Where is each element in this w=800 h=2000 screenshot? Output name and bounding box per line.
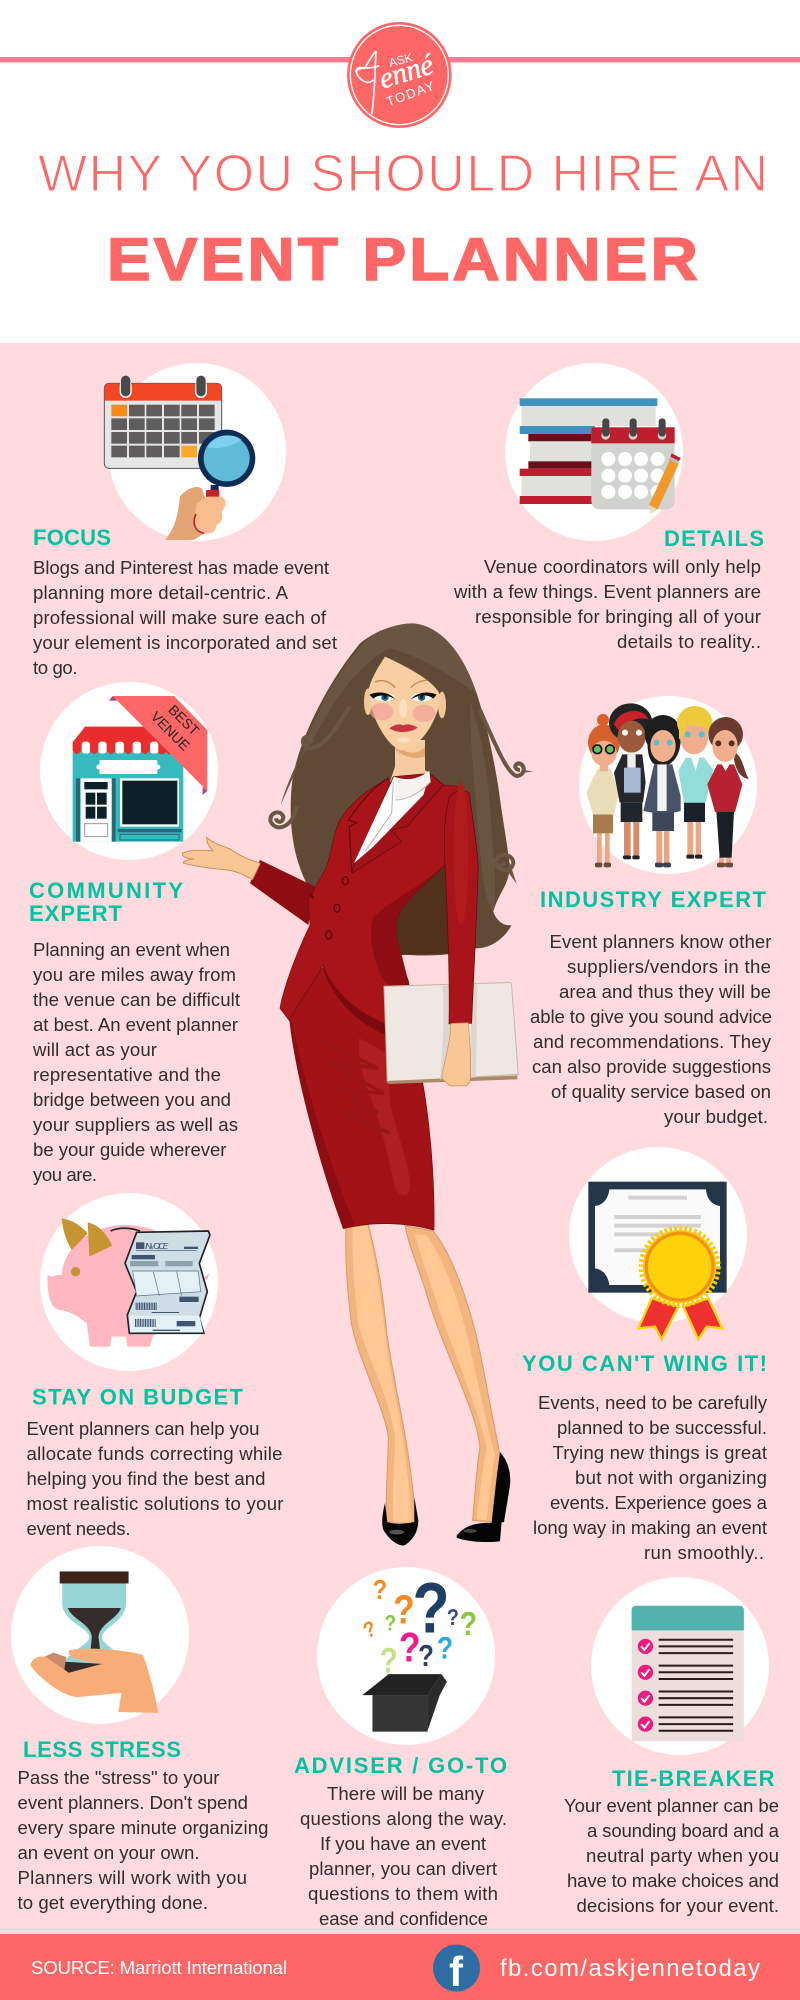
question marks: ? — [360, 1616, 379, 1644]
text: less stress: Planners will work with you — [18, 1867, 247, 1888]
question marks: ? — [380, 1642, 398, 1680]
less stress circle — [11, 1546, 189, 1724]
text: adviser / go-to — [300, 1783, 507, 1929]
neck, face and blouse — [364, 657, 446, 782]
panel: details — [453, 363, 764, 652]
icon: checklist — [632, 1606, 744, 1741]
text: focus: to go. — [33, 657, 78, 678]
facebook url: fb.com/askjennetoday — [500, 1955, 760, 1982]
text: community expert: bridge between you and — [33, 1089, 231, 1110]
heading: less stress: LESS STRESS — [23, 1737, 181, 1762]
text: focus: your element is incorporated and set — [33, 632, 338, 653]
panel: tie-breaker — [564, 1577, 780, 1916]
text: community expert: at best. An event planner — [33, 1014, 238, 1035]
panel: stay on budget — [26, 1193, 284, 1539]
blazer — [250, 771, 463, 1030]
panel: industry expert — [530, 696, 772, 1127]
woman 4 — [677, 706, 713, 859]
text: stay on budget: event needs. — [26, 1518, 130, 1539]
icon: hourglass in hand — [31, 1571, 158, 1713]
text: tie-breaker: neutral party when you — [586, 1845, 779, 1866]
skirt — [288, 950, 434, 1230]
text: stay on budget: Event planners can help you — [26, 1418, 260, 1439]
text: community expert: will act as your — [32, 1039, 157, 1060]
text: adviser / go-to: questions along the way. — [300, 1808, 507, 1829]
heading: industry expert: INDUSTRY EXPERT — [540, 887, 767, 912]
question marks: ? — [399, 1625, 420, 1671]
question marks: ? — [460, 1605, 477, 1642]
logo: Ask Jenné Today: TODAY — [384, 78, 436, 109]
question marks: ? — [413, 1569, 450, 1649]
text: industry expert: suppliers/vendors in the — [567, 956, 771, 977]
text: you can't wing it: long way in making an event — [533, 1517, 768, 1538]
text: adviser / go-to: ease and confidence — [319, 1908, 488, 1929]
source: SOURCE: Marriott International — [31, 1957, 287, 1978]
text: industry expert: area and thus they will be — [559, 981, 771, 1002]
heading: adviser / go-to: ADVISER / GO-TO — [294, 1753, 507, 1778]
gesturing hand — [182, 837, 260, 879]
icon: venue shop with ribbon — [73, 696, 207, 842]
icon: facebook — [433, 1944, 480, 1995]
community circle — [40, 682, 218, 860]
legs — [346, 1225, 510, 1545]
text: less stress: an event on your own. — [18, 1842, 200, 1863]
arm holding folder — [444, 782, 478, 1024]
icon: venue shop with ribbon: BEST — [165, 701, 203, 739]
text: stay on budget: helping you find the best and — [26, 1468, 266, 1489]
text: tie-breaker: have to make choices and — [567, 1870, 779, 1891]
title line 2: EVENT PLANNER — [107, 226, 701, 293]
icon: venue shop with ribbon: VENUE — [148, 708, 193, 754]
adviser circle — [317, 1567, 495, 1745]
text: community expert: you are. — [33, 1164, 97, 1185]
question marks: ? — [393, 1587, 415, 1633]
text: focus: professional will make sure each of — [33, 607, 327, 628]
text: details: responsible for bringing all of your — [475, 606, 761, 627]
text: focus: planning more detail-centric. A — [33, 582, 289, 603]
hand holding folder — [442, 1023, 471, 1086]
panel: less stress — [11, 1546, 268, 1913]
icon: certificate and rosette — [588, 1182, 727, 1339]
icon: calendar with magnifier — [104, 376, 255, 540]
text: details: Venue coordinators will only help — [484, 556, 761, 577]
text: less stress: to get everything done. — [18, 1892, 208, 1913]
text: details: details to reality.. — [617, 631, 761, 652]
text: stay on budget: most realistic solutions to your — [26, 1493, 284, 1514]
heading: focus: FOCUS — [33, 525, 111, 550]
question marks — [360, 1569, 477, 1680]
panel: community expert — [29, 682, 241, 1185]
heading: stay on budget: STAY ON BUDGET — [32, 1384, 244, 1410]
text: you can't wing it: run smoothly.. — [644, 1542, 764, 1563]
tie-breaker circle — [591, 1577, 769, 1755]
text: community expert: you are miles away from — [33, 964, 236, 985]
icon: facebook: f — [449, 1948, 464, 1995]
hair — [270, 623, 533, 956]
text: you can't wing it: Trying new things is great — [552, 1442, 768, 1463]
question marks: ? — [447, 1603, 459, 1630]
text: less stress: every spare minute organizing — [18, 1817, 268, 1838]
title line 1: WHY YOU SHOULD HIRE AN — [38, 145, 768, 203]
text: focus — [33, 557, 338, 678]
text: adviser / go-to: planner, you can divert — [309, 1858, 498, 1879]
central illustration: woman — [182, 623, 533, 1545]
text: you can't wing it: Events, need to be carefully — [538, 1392, 768, 1413]
open box — [362, 1674, 447, 1732]
text: tie-breaker: Your event planner can be — [564, 1795, 779, 1816]
details circle — [505, 363, 683, 541]
question marks: ? — [437, 1632, 453, 1666]
woman 2 — [609, 703, 652, 859]
panel: adviser / go-to — [294, 1567, 507, 1929]
heading: community expert: EXPERT — [29, 901, 123, 926]
text: industry expert: Event planners know other — [550, 931, 772, 952]
text: you can't wing it — [533, 1392, 768, 1563]
icon: piggy bank and invoice — [47, 1218, 210, 1347]
text: tie-breaker: decisions for your event. — [576, 1895, 779, 1916]
text: community expert — [32, 939, 241, 1185]
panel: you can't wing it — [522, 1147, 768, 1563]
logo: Ask Jenné Today: enné — [375, 48, 439, 95]
footer — [0, 1934, 800, 2000]
text: tie-breaker: a sounding board and a — [587, 1820, 780, 1841]
icon: books and calendar — [520, 398, 681, 514]
text: industry expert: able to give you sound advice — [530, 1006, 772, 1027]
heading: community expert — [29, 878, 183, 926]
heading: community expert: COMMUNITY — [29, 878, 183, 903]
question marks: ? — [418, 1638, 434, 1673]
wing circle — [569, 1147, 747, 1323]
panel: focus — [33, 363, 338, 678]
text: industry expert: can also provide suggestions — [532, 1056, 771, 1077]
text: less stress — [18, 1767, 268, 1913]
text: you can't wing it: but not with organizing — [575, 1467, 767, 1488]
question marks: ? — [384, 1611, 396, 1636]
text: tie-breaker — [564, 1795, 780, 1916]
text: less stress: Pass the "stress" to your — [18, 1767, 220, 1788]
text: adviser / go-to: There will be many — [327, 1783, 485, 1804]
text: adviser / go-to: questions to them with — [308, 1883, 498, 1904]
text: community expert: representative and the — [33, 1064, 221, 1085]
text: community expert: be your guide wherever — [33, 1139, 226, 1160]
text: industry expert — [530, 931, 772, 1127]
text: industry expert: of quality service based on — [551, 1081, 771, 1102]
text: details — [453, 556, 761, 652]
woman 3 — [643, 715, 681, 867]
text: you can't wing it: planned to be successful. — [557, 1417, 767, 1438]
text: adviser / go-to: If you have an event — [320, 1833, 487, 1854]
folder — [384, 983, 518, 1084]
text: stay on budget — [26, 1418, 284, 1539]
focus circle — [108, 363, 286, 541]
logo: Ask Jenné Today — [347, 22, 452, 128]
text: you can't wing it: events. Experience goes a — [550, 1492, 768, 1513]
text: community expert: Planning an event when — [33, 939, 230, 960]
heading: tie-breaker: TIE-BREAKER — [612, 1766, 775, 1791]
industry circle — [579, 696, 757, 874]
logo: Ask Jenné Today: ASK — [387, 50, 414, 70]
heading: details: DETAILS — [664, 526, 764, 551]
woman 5 — [707, 717, 749, 867]
text: less stress: event planners. Don't spend — [18, 1792, 248, 1813]
icon: piggy bank and invoice: INVOICE — [145, 1241, 169, 1251]
budget circle — [40, 1193, 218, 1371]
icon: box with question marks — [360, 1569, 477, 1732]
text: community expert: your suppliers as well as — [33, 1114, 238, 1135]
woman 1 — [586, 714, 620, 867]
question marks: ? — [373, 1575, 387, 1606]
icon: group of women — [586, 703, 749, 867]
text: community expert: the venue can be difficult — [33, 989, 241, 1010]
text: stay on budget: allocate funds correcting while — [26, 1443, 282, 1464]
text: focus: Blogs and Pinterest has made event — [33, 557, 330, 578]
heading: you can't wing it: YOU CAN'T WING IT! — [522, 1351, 767, 1376]
text: details: with a few things. Event planners are — [453, 581, 761, 602]
text: industry expert: your budget. — [664, 1106, 768, 1127]
text: industry expert: and recommendations. They — [533, 1031, 772, 1052]
